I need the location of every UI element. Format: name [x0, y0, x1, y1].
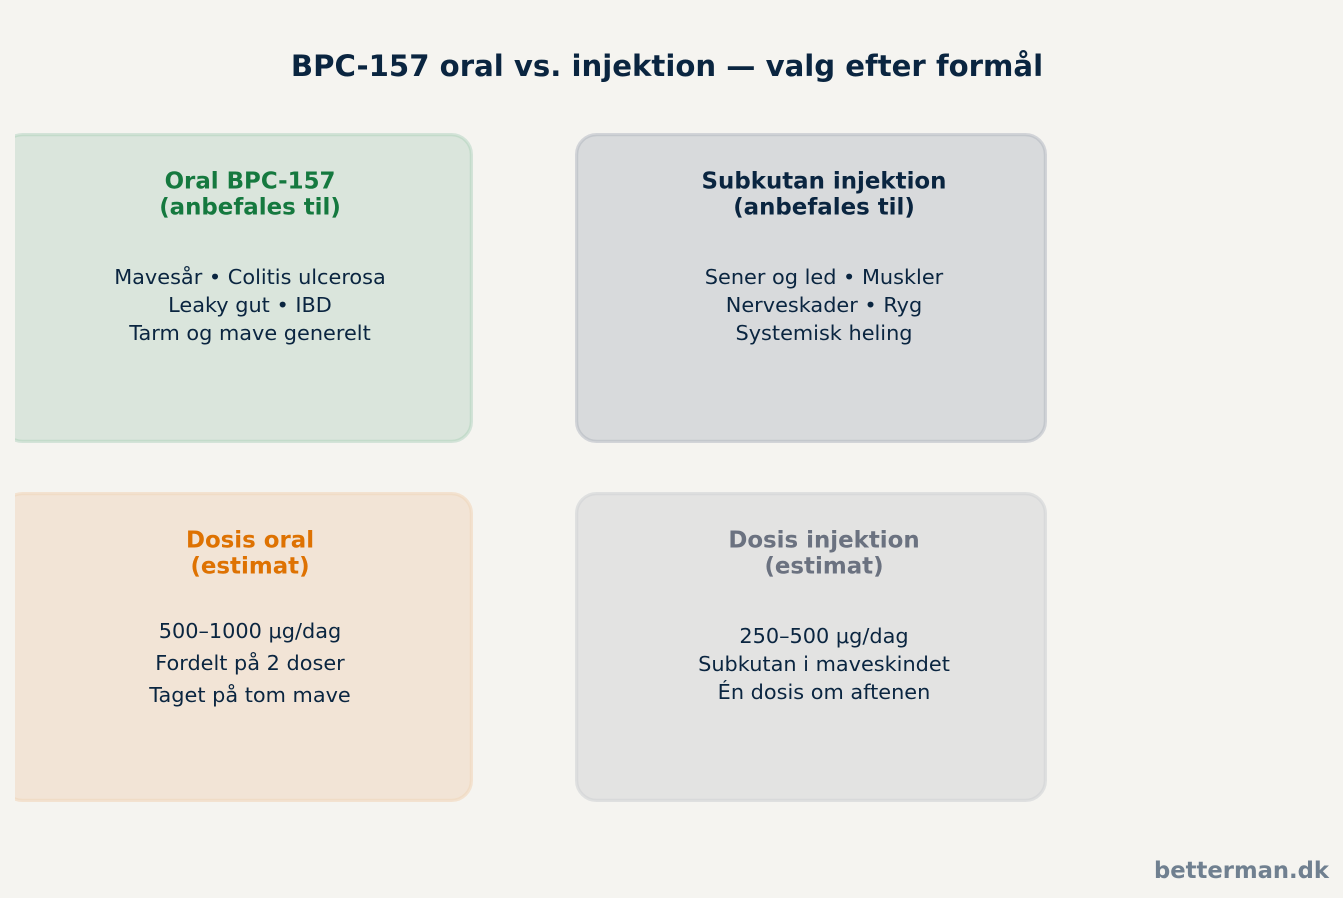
text: injection dose details: Én dosis om aftenen: [718, 679, 930, 704]
heading: injection dose: (estimat): [764, 554, 884, 580]
text: oral uses: Mavesår • Colitis ulcerosa: [114, 265, 386, 289]
text: injection uses: Systemisk heling: [736, 321, 912, 345]
heading: injection: (anbefales til): [733, 194, 915, 220]
text: injection uses: Nerveskader • Ryg: [726, 293, 922, 317]
panel: oral dose: [2, 494, 472, 800]
panel: oral recommended: [2, 134, 472, 442]
panel: injection recommended: [576, 134, 1046, 442]
panel: injection dose: [576, 494, 1046, 800]
watermark: betterman.dk: [1154, 858, 1330, 884]
heading: oral dose: Dosis oral: [186, 528, 314, 554]
text: injection dose details: Subkutan i maveskindet: [698, 652, 950, 676]
text: oral dose details: Fordelt på 2 doser: [155, 650, 345, 675]
heading: oral: (anbefales til): [159, 194, 341, 220]
heading: injection: Subkutan injektion: [702, 168, 946, 194]
title: BPC-157 oral vs. injektion — valg efter formål: [291, 49, 1043, 83]
text: oral dose details: Taget på tom mave: [148, 682, 351, 707]
heading: oral dose: (estimat): [190, 554, 310, 580]
text: injection uses: Sener og led • Muskler: [705, 265, 943, 289]
text: injection dose details: 250–500 μg/dag: [739, 624, 909, 648]
text: oral uses: Leaky gut • IBD: [168, 293, 332, 317]
heading: oral: Oral BPC-157: [165, 168, 335, 194]
text: oral uses: Tarm og mave generelt: [128, 321, 371, 345]
heading: injection dose: Dosis injektion: [728, 528, 920, 554]
text: oral dose details: 500–1000 μg/dag: [159, 619, 341, 643]
